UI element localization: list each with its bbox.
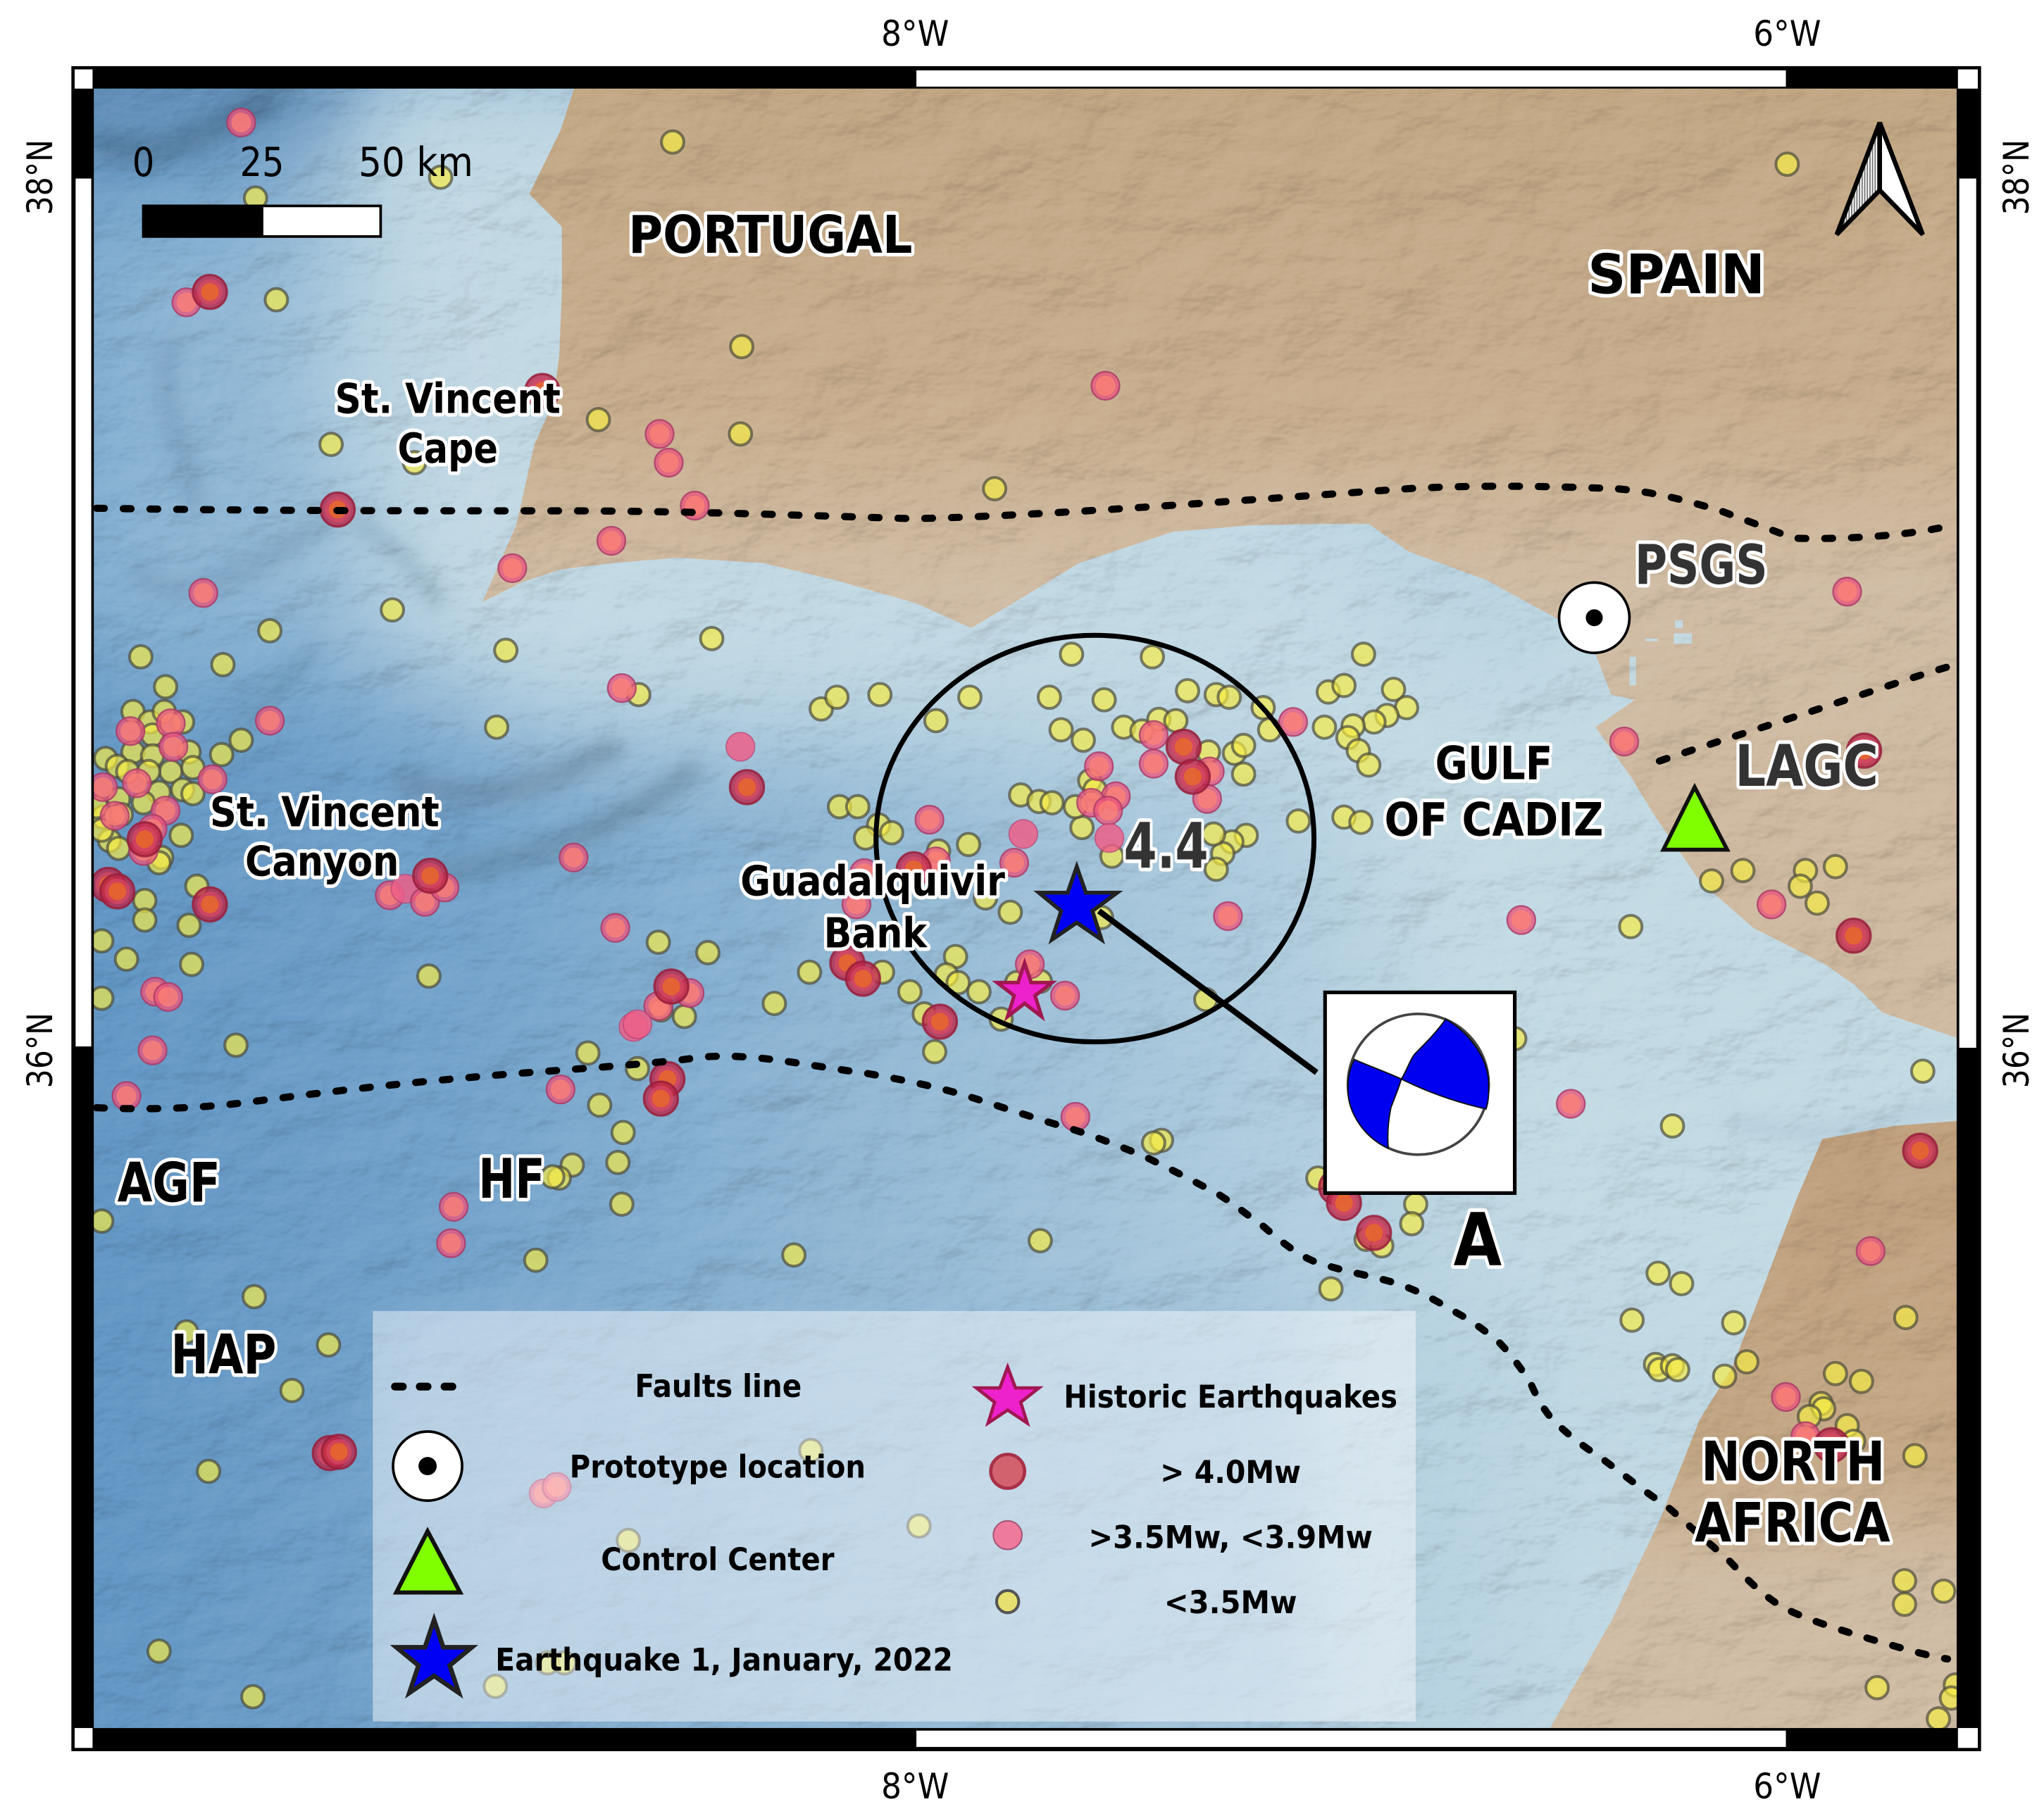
graticule labels: 8°W: [881, 1766, 949, 1807]
fault: southern: [96, 1056, 1948, 1659]
legend: control center: Control Center: [601, 1542, 835, 1578]
graticule labels: 8°W: [881, 13, 949, 54]
scale bar: 50 km: [359, 139, 473, 186]
label: North Africa: NORTH: [1701, 1430, 1885, 1493]
label: St. Vincent Canyon: St. Vincent: [210, 787, 440, 836]
label: Gulf of Cadiz: OF CADIZ: [1385, 794, 1603, 846]
historic earthquake star: [997, 963, 1052, 1017]
fault: northern: [96, 487, 1952, 539]
graticule labels: 6°W: [1753, 13, 1821, 54]
label: Gulf of Cadiz: [1385, 738, 1603, 846]
label: Guadalquivir Bank: [740, 856, 1006, 957]
earthquakes 3.5 to 3.9 Mw: [89, 108, 1885, 1508]
label: St. Vincent Cape: Cape: [397, 424, 498, 472]
fault: Lagos segment: [1659, 666, 1952, 761]
legend: prototype location: [393, 1432, 866, 1501]
label: HAP: HAP: [170, 1324, 276, 1387]
graticule labels: 38°N: [1996, 139, 2037, 215]
scale bar: 0: [132, 139, 154, 186]
legend panel: [373, 1311, 1416, 1722]
label: St. Vincent Cape: [335, 375, 561, 472]
legend: 3.5 to 3.9 Mw: >3.5Mw, <3.9Mw: [1088, 1520, 1373, 1556]
map labels: [118, 205, 1890, 1555]
north arrow: [1837, 123, 1923, 234]
leader line to focal mechanism: [1099, 911, 1316, 1072]
legend: historic earthquakes: Historic Earthquakes: [1064, 1379, 1397, 1415]
graticule labels: 38°N: [20, 139, 61, 215]
label: North Africa: AFRICA: [1695, 1491, 1890, 1555]
legend: below 3.5 Mw: <3.5Mw: [1164, 1585, 1297, 1621]
lagoon details: [1629, 620, 1692, 685]
earthquakes above 4.0 Mw: [92, 275, 1937, 1470]
scale bar: [132, 139, 473, 237]
label: PSGS: PSGS: [1635, 534, 1768, 597]
legend: earthquake 1 January 2022: Earthquake 1, January, 2022: [495, 1643, 953, 1679]
legend: historic earthquakes: [976, 1367, 1397, 1423]
magnitude label: 4.4: [1123, 810, 1209, 883]
label: St. Vincent Canyon: [210, 787, 440, 886]
submarine relief: [104, 104, 1955, 1132]
graticule labels: 6°W: [1753, 1766, 1821, 1807]
label: HF: HF: [478, 1148, 545, 1211]
label: AGF: AGF: [118, 1151, 220, 1215]
label: St. Vincent Cape: St. Vincent: [335, 375, 561, 423]
control center marker: [1664, 787, 1727, 850]
legend: above 4.0 Mw: [991, 1454, 1301, 1491]
graticule labels: 36°N: [1996, 1013, 2037, 1088]
legend: below 3.5 Mw: [997, 1585, 1297, 1621]
label: Guadalquivir Bank: Bank: [824, 908, 928, 957]
earthquake star: [1039, 867, 1117, 939]
graticule labels: 36°N: [20, 1013, 61, 1088]
epicentre search circle: [876, 635, 1314, 1042]
legend: faults line: Faults line: [635, 1369, 802, 1405]
inset: focal mechanism beachball: [1325, 992, 1515, 1193]
label: Portugal: PORTUGAL: [628, 205, 913, 265]
legend: prototype location: Prototype location: [570, 1450, 866, 1486]
legend: earthquake 1 January 2022: [397, 1620, 953, 1693]
label: Guadalquivir Bank: Guadalquivir: [740, 856, 1006, 905]
label: St. Vincent Canyon: Canyon: [245, 837, 399, 886]
legend: control center: [397, 1532, 835, 1593]
land: Portugal and Spain: [482, 86, 1959, 1039]
legend: above 4.0 Mw: > 4.0Mw: [1160, 1455, 1301, 1491]
land: North Africa: [1549, 1121, 1959, 1731]
label: Gulf of Cadiz: GULF: [1435, 738, 1552, 791]
label: Spain: SPAIN: [1588, 243, 1765, 306]
scale bar: 25: [240, 139, 284, 186]
label: LAGC: LAGC: [1735, 733, 1878, 800]
prototype location marker: [1559, 582, 1629, 653]
label: North Africa: [1695, 1430, 1890, 1555]
fault lines: [96, 487, 1952, 1659]
label: inset A: A: [1454, 1198, 1502, 1283]
